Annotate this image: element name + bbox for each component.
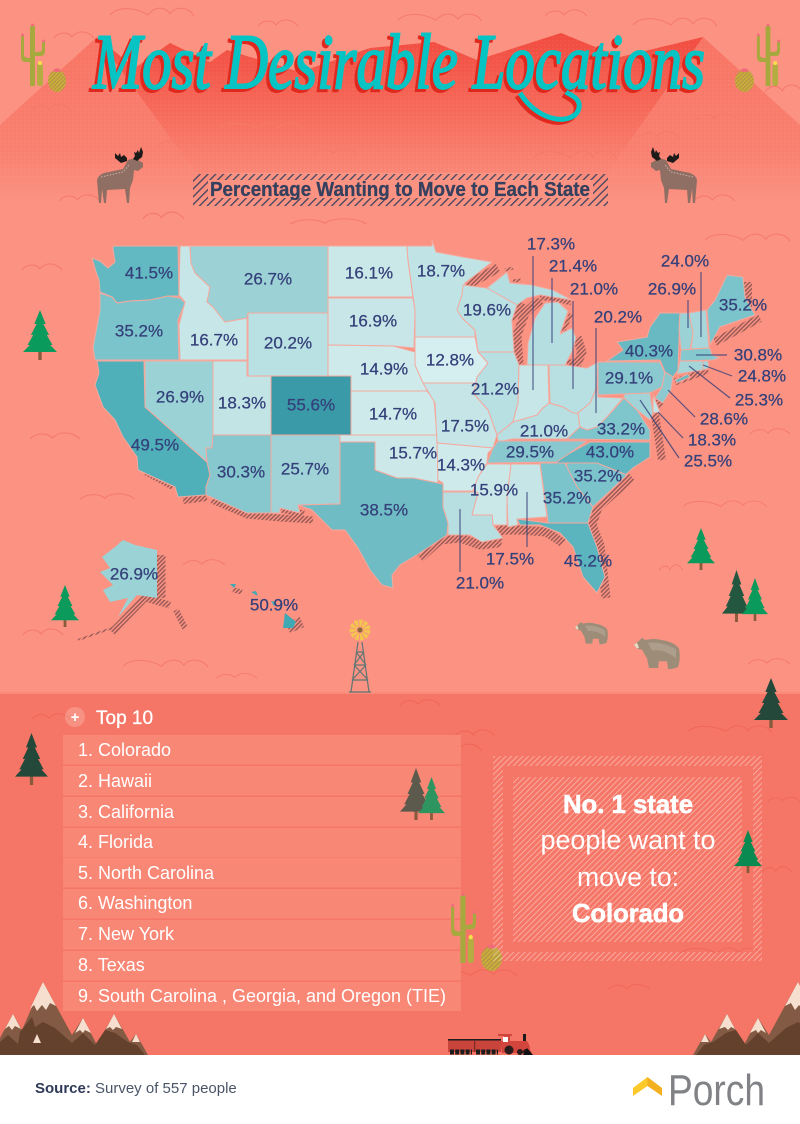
label: West Virginia: 20.2% bbox=[594, 308, 642, 326]
icon: tree west bbox=[23, 310, 57, 360]
icon: left moose bbox=[97, 147, 143, 203]
icon: callout tree bbox=[734, 830, 762, 873]
callout: No. 1 state: Colorado bbox=[572, 898, 684, 928]
map of US states bbox=[92, 240, 755, 628]
state: Virginia bbox=[567, 398, 650, 440]
label: New Hampshire: 24.0% bbox=[661, 252, 709, 270]
state: Minnesota bbox=[407, 240, 492, 337]
label: Delaware: 18.3% bbox=[688, 430, 736, 450]
label: Nevada: 26.9% bbox=[156, 388, 204, 406]
icon: tree east bbox=[687, 528, 715, 570]
state: New Mexico bbox=[271, 435, 340, 513]
label: Connecticut: 25.3% bbox=[735, 390, 783, 410]
coastline hatch shadows bbox=[78, 268, 760, 640]
label: Idaho: 16.7% bbox=[190, 330, 238, 350]
label: Utah: 18.3% bbox=[218, 394, 266, 412]
icon: list cactus bbox=[451, 893, 502, 971]
state: Wyoming bbox=[248, 313, 328, 376]
top 10 heading: Top 10 bbox=[96, 708, 153, 729]
label: Florida: 45.2% bbox=[564, 552, 612, 570]
state: Nevada bbox=[145, 361, 213, 462]
state: Connecticut bbox=[677, 361, 703, 374]
state: West Virginia bbox=[578, 387, 623, 430]
state: Oregon bbox=[93, 293, 185, 360]
state: South Carolina bbox=[566, 463, 627, 507]
label: Illinois: 21.2% bbox=[471, 380, 519, 398]
icon: train bbox=[448, 1034, 533, 1055]
callout: No. 1 state: move to: bbox=[577, 862, 679, 892]
row 4 bbox=[63, 828, 461, 858]
mountains right bbox=[693, 982, 800, 1055]
label: Colorado: 55.6% bbox=[287, 396, 335, 414]
subtitle: Percentage Wanting to Move to Each State bbox=[210, 179, 590, 201]
row 1 bbox=[63, 735, 461, 764]
label: Alabama: 17.5% bbox=[486, 550, 534, 568]
state: Wisconsin bbox=[457, 285, 517, 352]
state: Hawaii bbox=[230, 584, 296, 628]
state: Kentucky bbox=[497, 403, 580, 442]
row 6 bbox=[63, 889, 461, 918]
label: Arizona: 30.3% bbox=[217, 462, 265, 482]
label: Tennessee: 29.5% bbox=[506, 442, 554, 462]
state: Montana bbox=[190, 246, 328, 322]
subtitle bbox=[193, 174, 608, 206]
row 2 bbox=[63, 766, 461, 796]
label: South Dakota: 16.9% bbox=[349, 312, 397, 330]
mountain backdrop: outer bbox=[0, 37, 800, 200]
label: Indiana: 17.3% bbox=[527, 234, 575, 254]
state: Tennessee bbox=[487, 441, 587, 463]
row 9 bbox=[63, 982, 461, 1011]
state: Washington bbox=[92, 246, 179, 303]
icon: right barrel cactus bbox=[735, 68, 754, 92]
callout: No. 1 state: people want to bbox=[540, 825, 716, 855]
row 5 bbox=[63, 858, 461, 888]
icon: left barrel cactus bbox=[48, 68, 66, 92]
label: Michigan: 21.4% bbox=[549, 256, 597, 276]
state: Vermont bbox=[679, 313, 693, 350]
row 2: 2. Hawaii bbox=[78, 771, 152, 791]
icon: forest tree top right bbox=[754, 678, 788, 728]
label: Massachusetts: 30.8% bbox=[734, 346, 782, 364]
icon: green tree bbox=[742, 578, 768, 621]
label: Ohio: 21.0% bbox=[570, 280, 618, 298]
label: Mississippi: 15.9% bbox=[470, 480, 518, 500]
state: Illinois bbox=[473, 352, 519, 435]
state: Utah bbox=[213, 361, 271, 435]
state: South Dakota bbox=[328, 298, 415, 348]
row 7 bbox=[63, 920, 461, 950]
label: Arkansas: 14.3% bbox=[437, 456, 485, 474]
state: Iowa bbox=[415, 337, 488, 383]
label: California: 49.5% bbox=[131, 436, 179, 454]
state: Missouri bbox=[423, 383, 497, 448]
source note: Source: bbox=[35, 1080, 91, 1097]
label: Georgia: 35.2% bbox=[543, 488, 591, 508]
row 4: 4. Florida bbox=[78, 832, 154, 852]
icon: tree Alaska bbox=[51, 585, 79, 627]
decorative clouds bbox=[22, 8, 800, 678]
label: Oregon: 35.2% bbox=[115, 322, 163, 340]
state: Alaska bbox=[100, 540, 157, 617]
label: Texas: 38.5% bbox=[360, 500, 408, 520]
state: Colorado bbox=[271, 376, 351, 435]
callout: No. 1 state: No. 1 state bbox=[563, 789, 693, 819]
label: Iowa: 12.8% bbox=[426, 350, 474, 370]
state: Louisiana bbox=[443, 492, 503, 542]
icon: list trees bbox=[400, 768, 445, 820]
state: Michigan bbox=[487, 272, 576, 365]
row 3: 3. California bbox=[78, 802, 175, 822]
state: Pennsylvania bbox=[598, 362, 665, 395]
state: Kansas bbox=[351, 391, 437, 435]
top 10 list bbox=[63, 707, 461, 1011]
state: Maine bbox=[707, 275, 755, 345]
state: Idaho bbox=[179, 246, 247, 360]
state: Mississippi bbox=[472, 464, 511, 525]
row 1: 1. Colorado bbox=[78, 740, 171, 760]
label: Louisiana: 21.0% bbox=[456, 574, 504, 592]
row 3 bbox=[63, 797, 461, 826]
label: Alaska: 26.9% bbox=[110, 564, 158, 584]
row 9: 9. South Carolina , Georgia, and Oregon (TIE) bbox=[78, 986, 446, 1006]
row 7: 7. New York bbox=[78, 924, 175, 944]
state: Arkansas bbox=[437, 443, 493, 491]
state: Oklahoma bbox=[340, 435, 438, 483]
logo: Porch bbox=[633, 1066, 765, 1115]
state: Massachusetts bbox=[680, 348, 720, 361]
state: Indiana bbox=[513, 365, 549, 422]
label: Vermont: 26.9% bbox=[648, 280, 696, 298]
label: Kansas: 14.7% bbox=[369, 404, 417, 424]
top 10 heading bbox=[65, 707, 153, 729]
label: Virginia: 33.2% bbox=[597, 420, 645, 438]
label: New York: 40.3% bbox=[625, 342, 673, 360]
label: Maryland: 25.5% bbox=[684, 452, 732, 470]
icon: large bear bbox=[634, 638, 680, 669]
label: New Mexico: 25.7% bbox=[281, 460, 329, 478]
row 8 bbox=[63, 951, 461, 980]
callout: No. 1 state bbox=[493, 756, 762, 961]
state: New Hampshire bbox=[689, 310, 709, 349]
state: Ohio bbox=[549, 362, 598, 413]
icon: forest tree left bbox=[15, 733, 48, 785]
icon: dark tree bbox=[722, 570, 751, 622]
label: Washington: 41.5% bbox=[125, 264, 173, 282]
icon: right moose bbox=[651, 147, 697, 203]
label: New Jersey: 28.6% bbox=[700, 410, 748, 428]
state: Florida bbox=[517, 519, 605, 593]
logo: Porch: Porch bbox=[668, 1066, 765, 1115]
icon: left cactus bbox=[21, 24, 45, 86]
row 5: 5. North Carolina bbox=[78, 863, 215, 883]
label: Nebraska: 14.9% bbox=[360, 360, 408, 378]
label: Montana: 26.7% bbox=[244, 270, 292, 288]
state: California bbox=[95, 361, 210, 497]
state: Georgia bbox=[540, 463, 593, 523]
label: Pennsylvania: 29.1% bbox=[605, 368, 653, 388]
lower band bbox=[0, 692, 800, 1055]
state: Nebraska bbox=[328, 345, 427, 391]
icon: small bear bbox=[575, 622, 608, 644]
mountain backdrop: inner bbox=[0, 33, 800, 180]
state: Delaware bbox=[653, 395, 660, 413]
label: Minnesota: 18.7% bbox=[417, 262, 465, 280]
state: Rhode Island bbox=[703, 361, 709, 370]
label: Kentucky: 21.0% bbox=[520, 422, 568, 440]
label: Wisconsin: 19.6% bbox=[463, 300, 511, 320]
icon: right cactus bbox=[757, 24, 780, 86]
state: Alabama bbox=[507, 464, 547, 527]
label: Oklahoma: 15.7% bbox=[389, 444, 437, 462]
state: Arizona bbox=[206, 435, 271, 513]
label: South Carolina: 35.2% bbox=[574, 466, 622, 486]
label: North Carolina: 43.0% bbox=[586, 442, 634, 462]
mountains left bbox=[0, 982, 148, 1055]
state: New Jersey bbox=[655, 372, 673, 403]
state: North Dakota bbox=[328, 246, 413, 297]
source note: Survey of 557 people bbox=[95, 1080, 237, 1097]
label: North Dakota: 16.1% bbox=[345, 264, 393, 282]
row 8: 8. Texas bbox=[78, 955, 145, 975]
label: Hawaii: 50.9% bbox=[250, 596, 298, 614]
top 10 heading: + bbox=[71, 709, 80, 726]
state: Maryland bbox=[624, 393, 653, 420]
state: North Carolina bbox=[555, 442, 650, 480]
icon: windmill bbox=[349, 623, 371, 692]
footer bbox=[0, 1055, 800, 1124]
label: Wyoming: 20.2% bbox=[264, 334, 312, 352]
state: New York bbox=[607, 313, 690, 383]
label: Missouri: 17.5% bbox=[441, 416, 489, 436]
leader lines bbox=[460, 256, 732, 572]
label: Rhode Island: 24.8% bbox=[738, 366, 786, 386]
state percentage labels bbox=[110, 234, 786, 614]
label: Maine: 35.2% bbox=[719, 296, 767, 314]
row 6: 6. Washington bbox=[78, 893, 192, 913]
state: Texas bbox=[298, 442, 448, 588]
